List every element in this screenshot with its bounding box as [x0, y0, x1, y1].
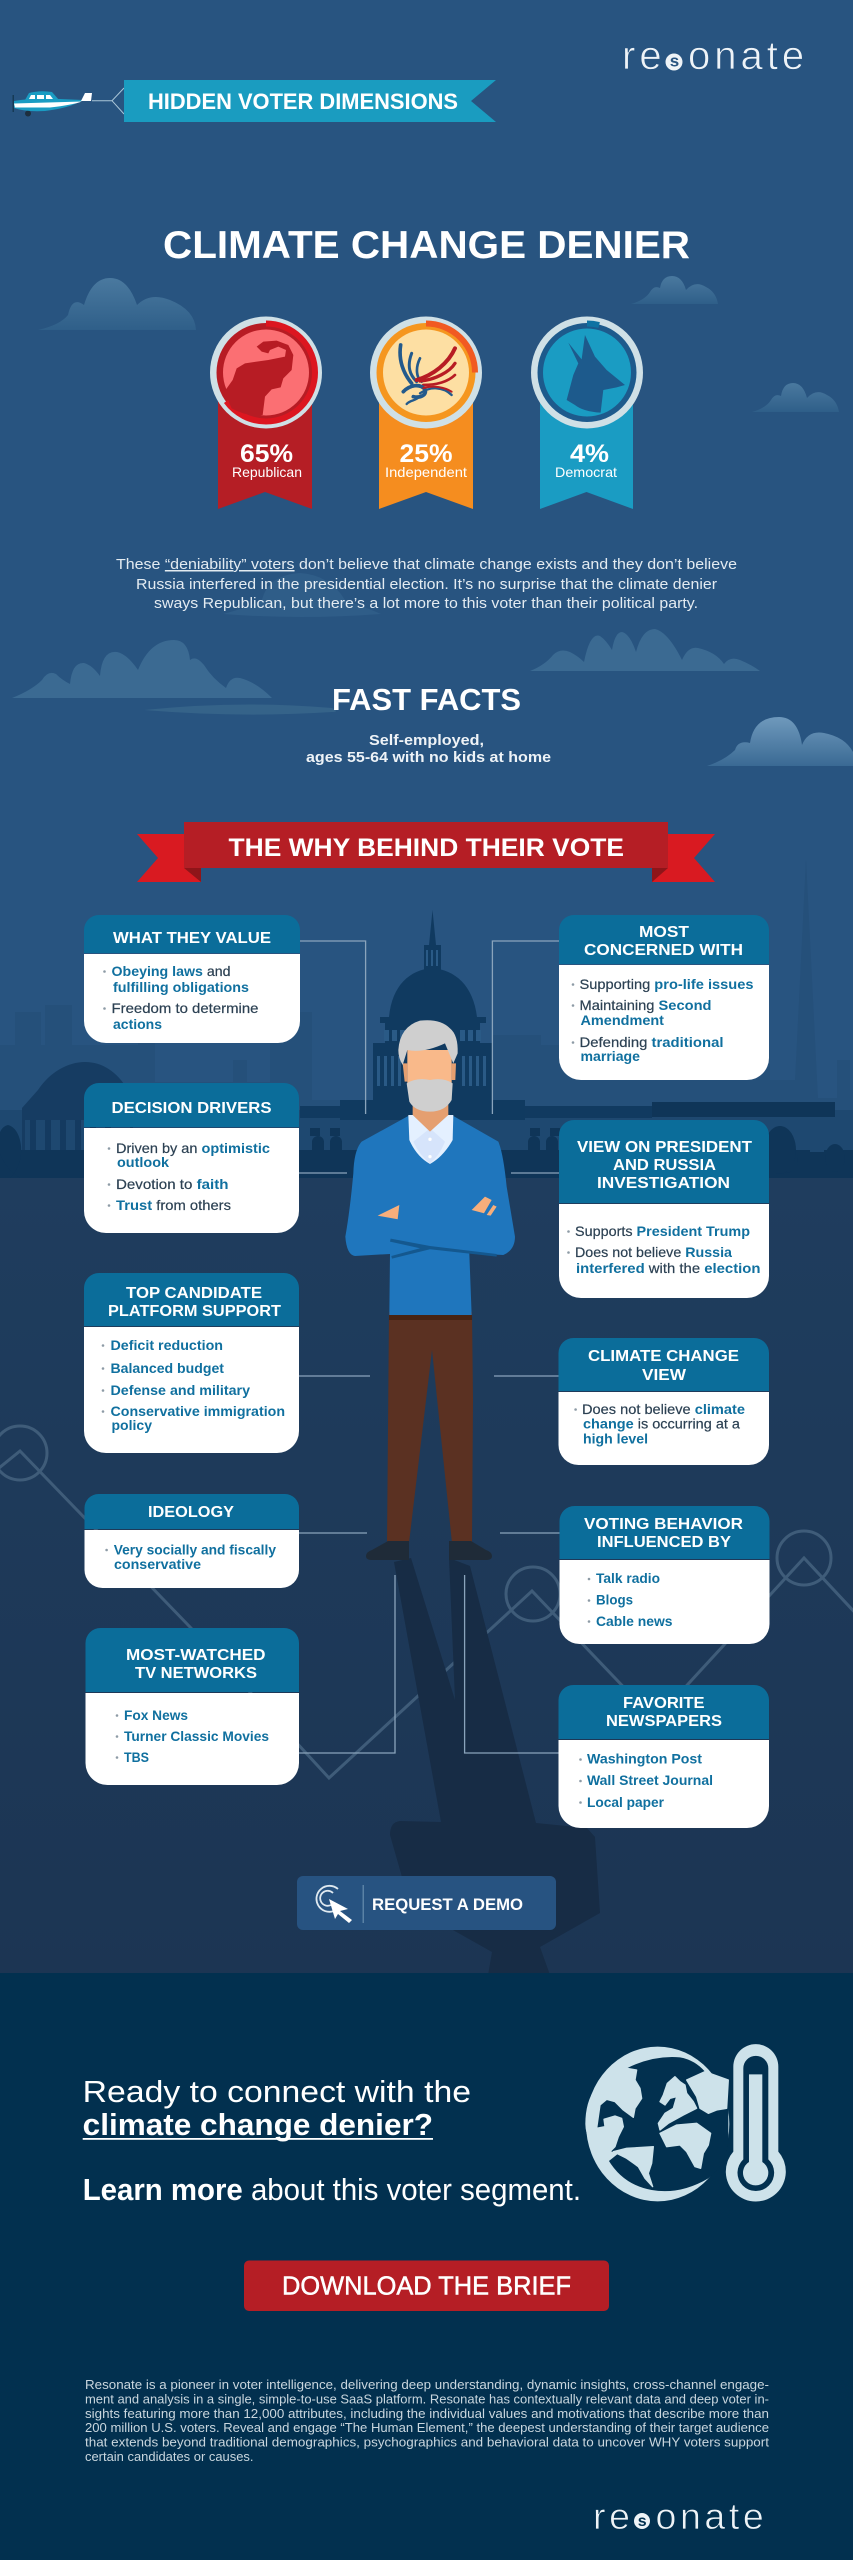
icon: cursor click: [316, 1886, 352, 1923]
card: what they value: Obeying laws and: [112, 963, 230, 979]
card: climate change view: high level: [583, 1430, 648, 1446]
badge: republican 65%: 65%: [240, 440, 293, 468]
banner: hidden voter dimensions: [124, 80, 496, 122]
card: most concerned with: marriage: [580, 1048, 640, 1064]
card: what they value: actions: [113, 1016, 162, 1032]
call to action heading: [83, 2074, 581, 2207]
card: most concerned with: CONCERNED WITH: [584, 942, 743, 959]
card: most-watched tv networks: [86, 1628, 299, 1785]
card: most-watched tv networks: MOST-WATCHED: [126, 1647, 266, 1664]
about resonate paragraph: sights featuring more than 12,000 attributes, including the individual values and motivations that describe more than: [85, 2407, 769, 2421]
fast facts text: [306, 732, 551, 766]
card: top candidate platform support: Defense and military: [110, 1382, 250, 1398]
clouds: [12, 276, 853, 766]
banner: hidden voter dimensions: HIDDEN VOTER DIMENSIONS: [148, 89, 458, 114]
card: decision drivers: [84, 1083, 299, 1233]
logo: resonate bottom: [593, 2495, 767, 2537]
card: voting behavior influenced by: Blogs: [596, 1592, 633, 1608]
about resonate paragraph: 200 million U.S. voters. Reveal and engage “The Human Element,” the deepest understanding of their target audience: [85, 2421, 769, 2435]
description text: [116, 556, 737, 612]
card: most concerned with: Defending traditional: [580, 1034, 724, 1050]
about resonate paragraph: Resonate is a pioneer in voter intelligence, delivering deep understanding, dynamic insights, cross-channel engage-: [85, 2378, 769, 2392]
ground background: [0, 1178, 853, 1978]
call to action heading: Ready to connect with the: [83, 2074, 471, 2109]
badge: republican 65%: Republican: [232, 464, 302, 480]
card: ideology: conservative: [114, 1556, 201, 1572]
card: view on president and russia investigation: Supports President Trump: [575, 1223, 750, 1239]
card: what they value: Freedom to determine: [112, 1000, 259, 1016]
logo: resonate top: onate: [688, 34, 808, 78]
card: favorite newspapers: Wall Street Journal: [587, 1772, 713, 1788]
card: most concerned with: Amendment: [580, 1012, 664, 1028]
card: view on president and russia investigation: AND RUSSIA: [613, 1157, 716, 1174]
card: what they value: fulfilling obligations: [113, 979, 249, 995]
call to action heading: Learn more about this voter segment.: [83, 2172, 581, 2207]
icon: airplane towing banner: [12, 88, 124, 116]
logo: resonate top: [622, 34, 808, 78]
heading: fast facts: FAST FACTS: [332, 682, 521, 717]
card: voting behavior influenced by: [560, 1506, 770, 1644]
card: most concerned with: Maintaining Second: [580, 997, 712, 1013]
card: most-watched tv networks: Turner Classic Movies: [124, 1728, 269, 1744]
background mountain line chart: [0, 1426, 853, 1778]
card: climate change view: change is occurring at a: [583, 1416, 740, 1432]
card: decision drivers: Driven by an optimistic: [116, 1140, 270, 1156]
button: download the brief: [244, 2260, 609, 2311]
card: most-watched tv networks: TBS: [124, 1749, 149, 1765]
card: voting behavior influenced by: VOTING BEHAVIOR: [584, 1516, 743, 1533]
card: voting behavior influenced by: INFLUENCED BY: [597, 1534, 732, 1551]
fast facts text: Self-employed,: [369, 732, 484, 749]
panel: footer background: [0, 1973, 853, 2560]
card: most concerned with: Supporting pro-life issues: [580, 976, 754, 992]
logo: resonate top: s: [670, 52, 683, 70]
card: view on president and russia investigation: Does not believe Russia: [575, 1244, 732, 1260]
card: ideology: Very socially and fiscally: [114, 1542, 276, 1558]
card: most-watched tv networks: TV NETWORKS: [135, 1665, 257, 1682]
call to action heading: climate change denier?: [83, 2107, 433, 2142]
card: voting behavior influenced by: Cable news: [596, 1613, 673, 1629]
card: climate change view: Does not believe climate: [582, 1401, 745, 1417]
card: top candidate platform support: Deficit reduction: [110, 1337, 223, 1353]
badge: independent 25%: Independent: [385, 464, 467, 480]
badge: democrat 4%: Democrat: [555, 464, 617, 480]
card: climate change view: VIEW: [642, 1367, 686, 1384]
card: favorite newspapers: FAVORITE: [623, 1695, 704, 1712]
icon: donkey: [567, 335, 625, 413]
card: favorite newspapers: Local paper: [587, 1794, 665, 1810]
card: decision drivers: DECISION DRIVERS: [112, 1100, 272, 1117]
card: ideology: [84, 1494, 299, 1588]
button: request a demo: [297, 1876, 556, 1930]
badge: democrat 4%: 4%: [570, 440, 609, 468]
card: decision drivers: Devotion to faith: [116, 1176, 228, 1192]
card: top candidate platform support: Conservative immigration: [110, 1403, 285, 1419]
icon: eagle: [400, 345, 455, 404]
badge: democrat 4%: [531, 316, 643, 509]
card: top candidate platform support: policy: [112, 1417, 152, 1433]
capitol building: [340, 910, 525, 1120]
icon: elephant: [226, 341, 293, 415]
upper body: [345, 1020, 515, 1315]
card: top candidate platform support: [84, 1273, 299, 1453]
icon: globe and thermometer: [586, 2044, 786, 2201]
about resonate paragraph: certain candidates or causes.: [85, 2450, 254, 2464]
badge: independent 25%: [370, 316, 482, 509]
card: decision drivers: Trust from others: [116, 1197, 231, 1213]
logo: resonate bottom: s: [638, 2513, 650, 2530]
description text: Russia interfered in the presidential election. It’s no surprise that the climate denier: [136, 576, 717, 593]
card: decision drivers: outlook: [117, 1154, 169, 1170]
card: climate change view: CLIMATE CHANGE: [588, 1348, 739, 1365]
ribbon: the why behind their vote: THE WHY BEHIND THEIR VOTE: [228, 834, 624, 862]
about resonate paragraph: that extends beyond traditional demographics, psychographics and behavioral data to uncover WHY voters support: [85, 2436, 770, 2450]
button: download the brief: DOWNLOAD THE BRIEF: [282, 2270, 571, 2300]
card: most concerned with: MOST: [639, 924, 690, 941]
card: most concerned with: [559, 915, 769, 1080]
card: ideology: IDEOLOGY: [148, 1504, 235, 1521]
logo: resonate bottom: onate: [656, 2495, 767, 2537]
badge: independent 25%: 25%: [400, 440, 452, 468]
card: favorite newspapers: Washington Post: [587, 1750, 702, 1766]
shoes: [366, 1541, 492, 1560]
card: what they value: [84, 915, 300, 1043]
card: top candidate platform support: TOP CANDIDATE: [126, 1285, 262, 1302]
person shadow: [390, 1558, 600, 1975]
title: CLIMATE CHANGE DENIER: [163, 224, 690, 267]
card: top candidate platform support: PLATFORM SUPPORT: [108, 1303, 282, 1320]
trousers: [387, 1312, 473, 1543]
card: favorite newspapers: NEWSPAPERS: [606, 1713, 722, 1730]
card: view on president and russia investigation: INVESTIGATION: [597, 1175, 730, 1192]
connector lines: [299, 941, 560, 1753]
about resonate paragraph: ment and analysis in a single, simple-to-use SaaS platform. Resonate has contextually relevant data and deep voter in-: [85, 2392, 769, 2406]
card: climate change view: [558, 1338, 769, 1465]
badge: republican 65%: [210, 316, 322, 509]
logo: resonate bottom: re: [593, 2495, 634, 2537]
belt: [389, 1315, 472, 1320]
card: most-watched tv networks: Fox News: [124, 1707, 188, 1723]
card: voting behavior influenced by: Talk radio: [596, 1570, 660, 1586]
description text: sways Republican, but there’s a lot more to this voter than their political party.: [154, 595, 698, 612]
button: request a demo: REQUEST A DEMO: [372, 1895, 523, 1914]
skyline background: [0, 858, 853, 1178]
card: view on president and russia investigation: VIEW ON PRESIDENT: [577, 1139, 753, 1156]
description text: These “deniability” voters don’t believe that climate change exists and they don’t believe: [116, 556, 737, 573]
fast facts text: ages 55-64 with no kids at home: [306, 749, 551, 766]
logo: resonate top: re: [622, 34, 666, 78]
card: view on president and russia investigation: interfered with the election: [576, 1260, 760, 1276]
sky background: [0, 0, 853, 1180]
ribbon: the why behind their vote: [137, 822, 715, 882]
person illustration: [345, 1020, 515, 1560]
card: view on president and russia investigation: [559, 1120, 769, 1298]
card: top candidate platform support: Balanced budget: [110, 1360, 224, 1376]
card: what they value: WHAT THEY VALUE: [113, 930, 271, 947]
card: favorite newspapers: [558, 1685, 769, 1828]
about resonate paragraph: [85, 2378, 770, 2464]
